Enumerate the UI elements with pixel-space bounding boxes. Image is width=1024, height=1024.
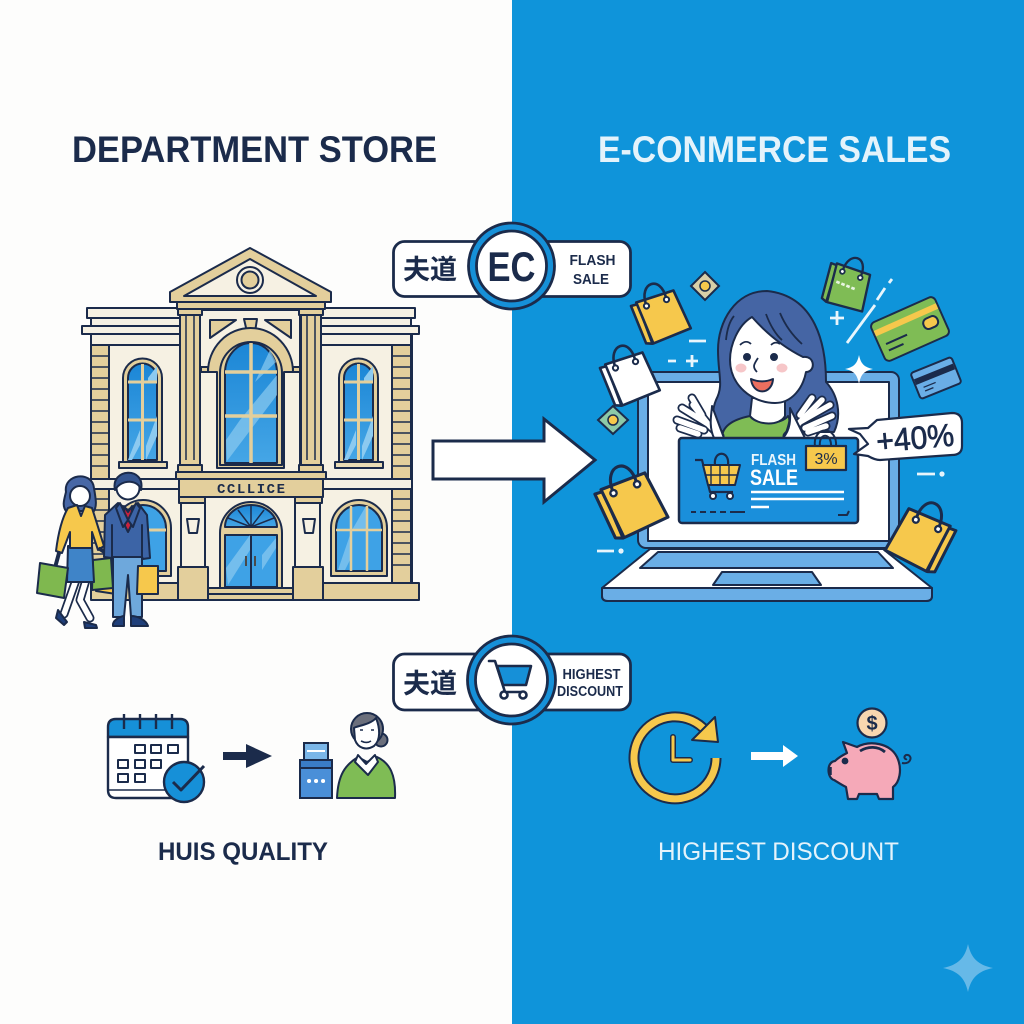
woman face bbox=[730, 317, 813, 403]
lamps bbox=[187, 519, 315, 533]
quoin lines bbox=[91, 356, 411, 565]
woman hands bbox=[677, 398, 832, 438]
illustration: laptop with shopper bbox=[602, 291, 962, 601]
badge: EC flash sale: SALE bbox=[573, 271, 609, 288]
building wall bbox=[91, 334, 412, 588]
label: highest discount: HIGHEST DISCOUNT bbox=[658, 838, 899, 866]
background: right panel bbox=[512, 0, 1024, 1024]
laptop screen bbox=[648, 382, 889, 541]
speech bubble +40%: +40% bbox=[875, 417, 956, 459]
icon: cash register bbox=[300, 743, 332, 798]
sparkles and dashes bbox=[597, 279, 943, 552]
shopping bag: yellow right bbox=[883, 493, 962, 576]
arrow: right bottom bbox=[751, 745, 798, 767]
plinth bbox=[91, 567, 419, 600]
central arrow bbox=[433, 419, 595, 502]
left column bbox=[178, 308, 202, 472]
shopping bag: yellow left bbox=[589, 457, 670, 542]
icon: cart bbox=[489, 661, 531, 698]
shopping bag: yellow top bbox=[627, 277, 692, 347]
pediment bbox=[170, 248, 331, 309]
label: huis quality: HUIS QUALITY bbox=[158, 838, 328, 866]
woman top bbox=[722, 416, 789, 438]
laptop lid bbox=[638, 372, 899, 548]
badge: cart highest discount: HIGHEST bbox=[562, 667, 621, 683]
door bbox=[220, 502, 282, 588]
right column bbox=[299, 308, 323, 472]
upper cornice bbox=[82, 308, 419, 345]
arrow: left bottom bbox=[223, 744, 272, 768]
sparkle star bbox=[845, 355, 873, 384]
woman's green bag bbox=[37, 563, 68, 598]
mid band bbox=[91, 479, 412, 489]
badge: cart highest discount bbox=[394, 636, 630, 724]
icon: top diamond bbox=[691, 272, 719, 300]
lower pilasters bbox=[181, 497, 320, 567]
badge: EC flash sale: 夫道 bbox=[403, 255, 457, 285]
woman hair bbox=[713, 291, 838, 432]
steps bbox=[208, 588, 293, 600]
background: left panel bbox=[0, 0, 512, 1024]
icon: left diamond bbox=[598, 406, 628, 434]
flash sale panel: SALE bbox=[750, 465, 798, 490]
panel lines bbox=[751, 492, 844, 507]
icon: piggy bank: $ bbox=[866, 713, 878, 735]
lower right window bbox=[331, 500, 387, 576]
flash sale panel bbox=[679, 438, 858, 523]
man's yellow bag bbox=[137, 566, 158, 594]
illustration: department store building bbox=[82, 248, 419, 600]
right quoins bbox=[392, 345, 411, 583]
icon: green credit card bbox=[869, 296, 951, 362]
man bbox=[104, 473, 150, 626]
badge: EC flash sale: EC bbox=[488, 243, 536, 290]
woman neck bbox=[750, 398, 785, 424]
discount tag: 3% bbox=[814, 451, 838, 468]
badge: EC flash sale bbox=[394, 223, 630, 309]
cart icon bbox=[695, 454, 740, 499]
upper side windows bbox=[119, 358, 167, 468]
flash sale text: FLASH bbox=[751, 452, 796, 469]
icon: blue credit card bbox=[910, 357, 962, 399]
title: department store: DEPARTMENT STORE bbox=[72, 128, 437, 170]
title: e-commerce sales: E-CONMERCE SALES bbox=[598, 128, 951, 170]
woman bbox=[56, 476, 110, 628]
icon: calendar with check bbox=[108, 714, 204, 802]
left quoins bbox=[91, 345, 109, 583]
central lower wall bbox=[205, 497, 295, 588]
entablature bbox=[176, 472, 326, 498]
badge: EC flash sale: FLASH bbox=[570, 252, 616, 269]
green bag middle bbox=[92, 558, 113, 590]
shopping bag: white bbox=[596, 339, 661, 409]
central bay bbox=[200, 310, 300, 472]
speech bubble +40% bbox=[849, 413, 962, 460]
central arch window bbox=[201, 328, 300, 468]
shopping bag: green bbox=[817, 250, 880, 316]
badge: cart highest discount: DISCOUNT bbox=[557, 684, 623, 700]
discount tag bbox=[806, 430, 846, 470]
icon: piggy bank bbox=[828, 708, 911, 799]
keystone ornaments bbox=[210, 319, 291, 338]
entablature: CCLLICE bbox=[217, 482, 285, 498]
woman facial features bbox=[726, 313, 802, 391]
illustration: shopper couple bbox=[37, 473, 158, 628]
decorative star bbox=[943, 944, 993, 992]
lower left window bbox=[115, 500, 171, 576]
icon: store clerk bbox=[337, 713, 395, 798]
laptop base bbox=[602, 549, 932, 601]
badge: cart highest discount: 夫道 bbox=[403, 669, 457, 699]
yellow bag behind bbox=[96, 566, 116, 594]
icon: clock with arrow bbox=[634, 717, 718, 799]
